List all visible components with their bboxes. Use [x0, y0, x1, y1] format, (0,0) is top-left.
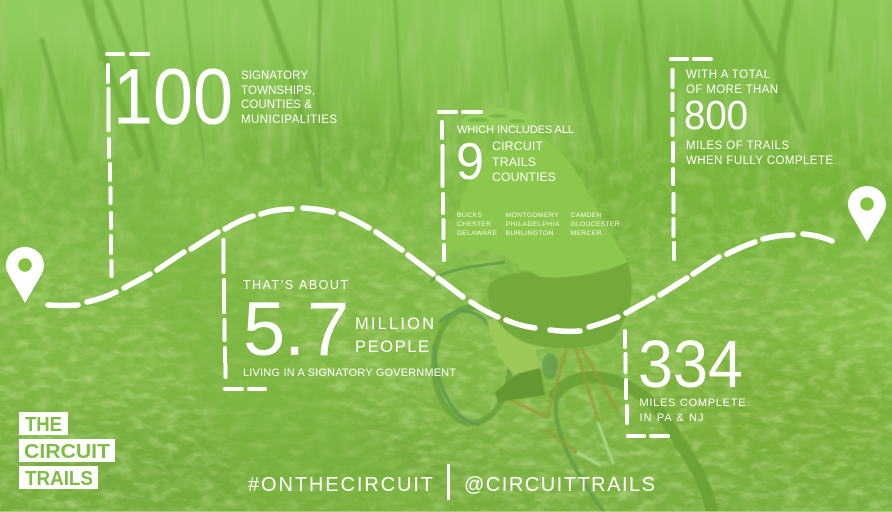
stat: 100: 100 — [113, 52, 233, 140]
text: signatory description: MUNICIPALITIES — [241, 114, 337, 126]
text: million people: MILLION — [355, 315, 434, 333]
text: circuit trails counties — [492, 139, 556, 184]
text: million people — [355, 315, 434, 356]
logo: The Circuit Trails: CIRCUIT — [24, 440, 110, 463]
text: signatory description: SIGNATORY — [241, 70, 308, 82]
dashed trail line — [48, 208, 832, 331]
background: cyclist and bicycle — [430, 109, 713, 512]
text: county list: GLOUCESTER — [570, 221, 620, 228]
dashed bracket: 334 callout — [625, 331, 668, 436]
logo: The Circuit Trails: TRAILS — [25, 467, 93, 490]
text: county list — [457, 212, 620, 237]
text: circuit trails counties: COUNTIES — [492, 170, 556, 184]
callout: 5.7 million people — [224, 240, 456, 389]
dashed bracket: 9 callout — [439, 112, 481, 260]
stat: 800: 800 — [684, 92, 748, 138]
text: county list: MONTGOMERY — [506, 212, 559, 219]
text: signatory description — [241, 70, 337, 126]
text: hashtag: #ONTHECIRCUIT — [248, 474, 433, 496]
stat: 9: 9 — [456, 133, 484, 191]
callout: 100 signatories — [107, 52, 337, 276]
text: county list: MERCER — [570, 230, 602, 237]
text: circuit trails counties: TRAILS — [492, 155, 536, 169]
text: miles of trails when fully complete — [686, 140, 833, 167]
dashed bracket: 5.7 callout — [224, 240, 265, 389]
logo: The Circuit Trails: THE — [25, 413, 62, 436]
text: that's about: THAT’S ABOUT — [243, 278, 348, 292]
text: twitter handle: @CIRCUITTRAILS — [464, 474, 655, 496]
text: miles complete in PA and NJ: MILES COMPLETE — [640, 397, 746, 409]
text: with a total of more than: WITH A TOTAL — [686, 69, 771, 81]
text: circuit trails counties: CIRCUIT — [492, 139, 543, 153]
text: signatory description: COUNTIES & — [241, 99, 312, 111]
icon: end map pin — [848, 186, 886, 242]
callout: 9 counties — [439, 112, 620, 260]
text: county list: BURLINGTON — [506, 230, 554, 237]
text: living in a signatory government: LIVING IN A SIGNATORY GOVERNMENT — [243, 367, 456, 379]
text: with a total of more than — [686, 69, 778, 96]
text: miles of trails when fully complete: WHEN FULLY COMPLETE — [686, 155, 833, 167]
background: bottom edge — [0, 511, 892, 512]
callout: 334 miles — [625, 327, 746, 436]
text: county list: DELAWARE — [457, 230, 497, 237]
dashed bracket: 100 callout — [107, 54, 148, 276]
text: county list: PHILADELPHIA — [506, 221, 560, 228]
callout: 800 miles — [671, 59, 833, 259]
divider — [447, 464, 450, 500]
text: miles complete in PA and NJ — [640, 397, 746, 424]
trail surface — [125, 200, 419, 511]
logo: The Circuit Trails — [19, 412, 115, 490]
text: county list: BUCKS — [457, 212, 482, 219]
icon: start map pin — [6, 247, 44, 303]
text: miles of trails when fully complete: MILES OF TRAILS — [686, 140, 789, 152]
stat: 334: 334 — [638, 327, 743, 402]
text: which includes all: WHICH INCLUDES ALL — [457, 124, 574, 136]
dashed bracket: 800 callout — [671, 59, 711, 259]
text: million people: PEOPLE — [355, 338, 429, 356]
stat: 5.7: 5.7 — [243, 287, 349, 372]
text: county list: CAMDEN — [570, 212, 602, 219]
footer: social handles — [248, 464, 655, 500]
text: with a total of more than: OF MORE THAN — [686, 84, 778, 96]
text: signatory description: TOWNSHIPS, — [241, 85, 315, 97]
text: county list: CHESTER — [457, 221, 491, 228]
text: miles complete in PA and NJ: IN PA & NJ — [640, 412, 704, 424]
